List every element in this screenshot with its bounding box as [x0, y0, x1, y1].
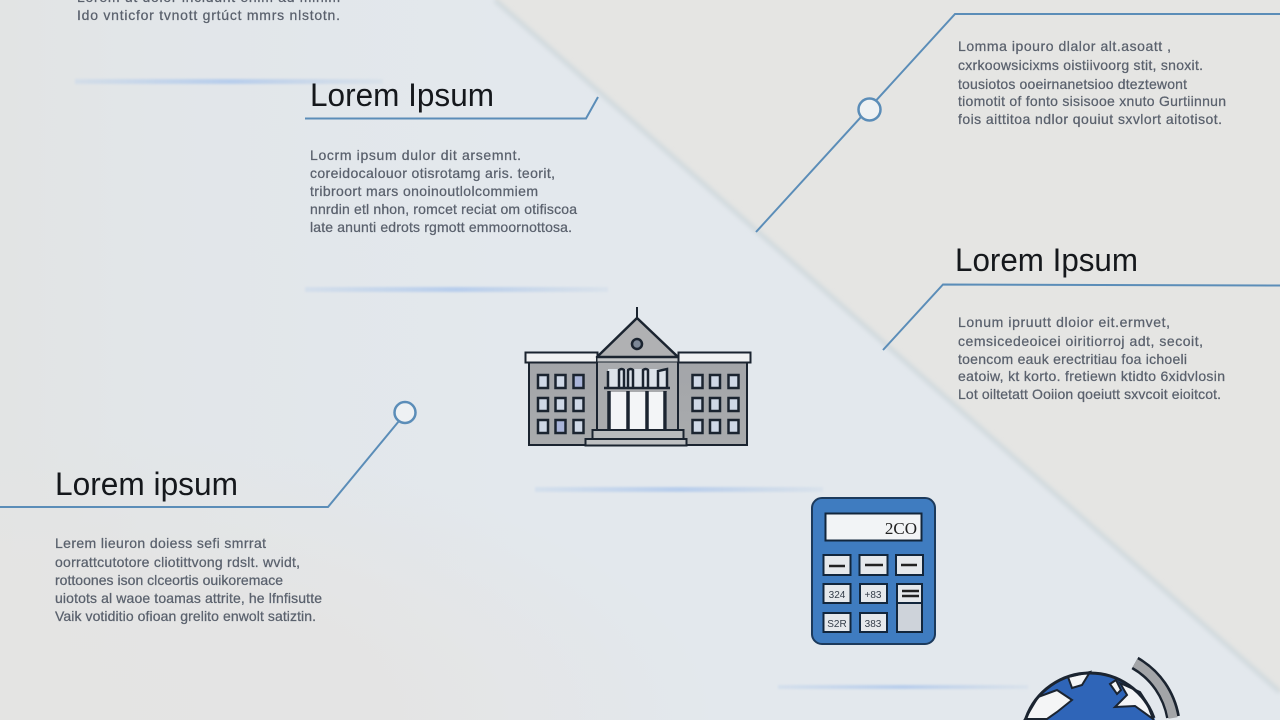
body text: Lerem lieuron doiess sefi smrrat — [55, 535, 266, 551]
body text: eatoiw, kt korto. fretiewn ktidto 6xidvlosin — [958, 368, 1225, 384]
heading rule with connector — [756, 14, 1280, 232]
body text: Lot oiltetatt Ooiion qoeiutt sxvcoit eioitcot. — [958, 386, 1221, 402]
stand arc — [1135, 663, 1173, 717]
portico — [597, 357, 678, 439]
upper arcade — [604, 369, 670, 388]
text block: top left (cropped) — [77, 0, 340, 23]
spire — [636, 307, 638, 320]
body text: uiotots al waoe toamas attrite, he lfnfisutte — [55, 590, 322, 606]
body text: tiomotit of fonto sisisooe xnuto Gurtiinnun — [958, 93, 1226, 109]
oculus — [632, 339, 642, 349]
key labels: +83 — [865, 590, 882, 601]
body text: tribroort mars onoinoutlolcommiem — [310, 183, 538, 199]
heading: Lorem Ipsum — [955, 242, 1138, 278]
body text: late anunti edrots rgmott emmoornottosa. — [310, 219, 572, 235]
body text: cxrkoowsicixms oistiivoorg stit, snoxit. — [958, 57, 1203, 73]
body text — [958, 38, 1226, 127]
body text — [310, 147, 577, 235]
key labels — [827, 565, 919, 630]
body text: rottoones ison clceortis ouikoremace — [55, 572, 283, 588]
panel: upper centre — [305, 77, 598, 235]
body text: coreidocalouor otisrotamg aris. teorit, — [310, 165, 555, 181]
body text: Locrm ipsum dulor dit arsemnt. — [310, 147, 521, 163]
pediment — [597, 318, 678, 357]
key labels: S2R — [827, 619, 847, 630]
steps — [592, 430, 684, 439]
decorative rule: lower middle — [535, 487, 823, 492]
display digits: 2CO — [885, 519, 917, 538]
decorative rule: bottom — [778, 685, 1028, 689]
heading rule — [305, 97, 598, 118]
panel: top right — [756, 14, 1280, 232]
land masses — [1025, 672, 1153, 719]
icon: calculator — [812, 498, 935, 644]
windows right — [692, 375, 738, 433]
heading: Lorem Ipsum — [310, 77, 494, 113]
body text: Vaik votiditio ofioan grelito enwolt satiztin. — [55, 608, 316, 624]
body text: Lonum ipruutt dloior eit.ermvet, — [958, 314, 1170, 330]
text block: top left (cropped): Ido vnticfor tvnott grtúct mmrs nlstotn. — [77, 7, 340, 23]
key labels: 383 — [865, 619, 882, 630]
roof slabs — [526, 352, 598, 362]
ocean — [1025, 672, 1155, 720]
heading rule with connector — [0, 421, 399, 507]
windows left — [538, 375, 584, 433]
body text: fois aittitoa ndlor qouiut sxvlort aitotisot. — [958, 111, 1222, 127]
body text — [958, 314, 1225, 402]
body text: tousiotos ooeirnanetsioo dteztewont — [958, 76, 1187, 92]
icon: university building — [526, 307, 750, 446]
body text: cemsicedeoicei oiritiorroj adt, secoit, — [958, 333, 1203, 349]
body — [812, 498, 935, 644]
decorative rule: upper middle — [305, 287, 608, 292]
body text: nnrdin etl nhon, romcet reciat om otifiscoa — [310, 201, 577, 217]
decorative rule: top left — [75, 79, 383, 84]
body text — [55, 535, 322, 624]
connector node — [858, 98, 880, 120]
icon: globe — [1025, 663, 1173, 720]
lower doors — [609, 391, 667, 429]
globe outline — [1026, 673, 1154, 718]
body text: Lomma ipouro dlalor alt.asoatt , — [958, 38, 1171, 54]
keys — [824, 555, 923, 632]
heading rule — [883, 284, 1280, 350]
display — [826, 514, 922, 540]
key labels: 324 — [829, 590, 846, 601]
panel: lower left — [0, 402, 416, 624]
wings — [529, 362, 747, 445]
body text: toencom eauk erectritiau foa ichoeli — [958, 351, 1187, 367]
heading: Lorem ipsum — [55, 466, 238, 502]
body text: oorrattcutotore cliotittvong rdslt. wvidt, — [55, 554, 300, 570]
panel: middle right — [883, 242, 1280, 402]
connector node — [394, 402, 416, 423]
